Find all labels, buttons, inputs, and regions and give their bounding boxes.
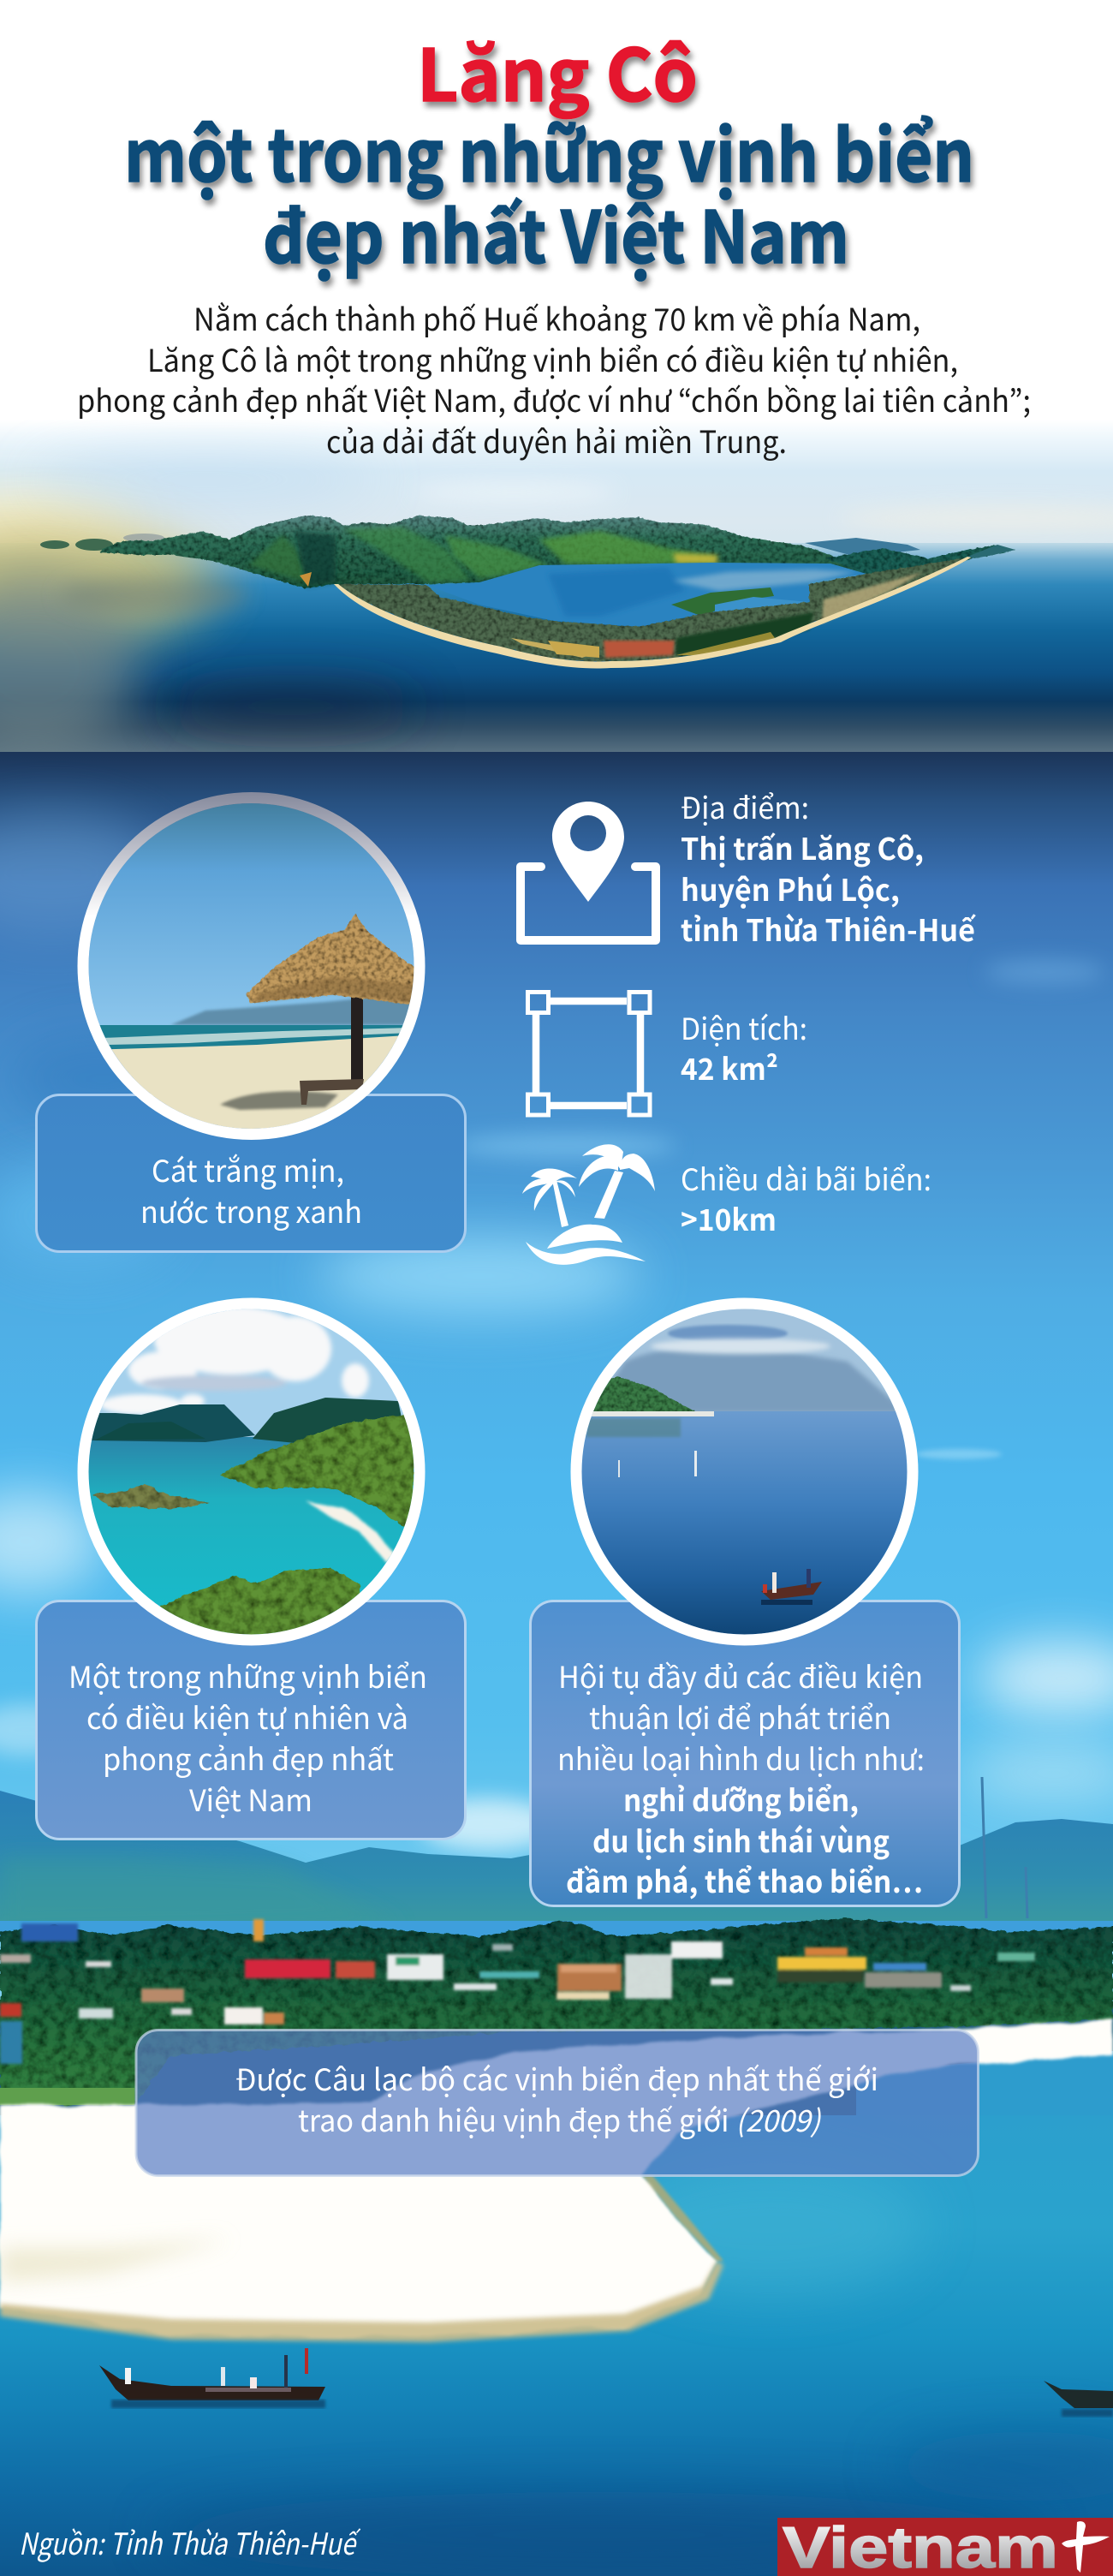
area text (681, 1005, 807, 1089)
location text: Địa điểm: (681, 784, 809, 828)
panel: tourism caption: đầm phá, thể thao biển… (566, 1858, 923, 1902)
green mountains (99, 516, 866, 588)
panel: white sand caption: Cát trắng mịn, (152, 1148, 344, 1191)
village houses (0, 1919, 1035, 2064)
panel: world bay award: Được Câu lạc bộ các vịnh biển đẹp nhất thế giới (235, 2056, 878, 2100)
far headland (805, 538, 920, 555)
panel: tourism caption: thuận lợi để phát triển (589, 1695, 891, 1738)
panel: world bay award: trao danh hiệu vịnh đẹp thế giới (2009) (298, 2097, 822, 2141)
area text: 42 km² (681, 1046, 778, 1089)
panel: bay caption: Một trong những vịnh biển (68, 1654, 427, 1697)
main panel background (0, 752, 1113, 2576)
icon: area square (527, 992, 650, 1115)
mountains (0, 1791, 1113, 1921)
location text: tỉnh Thừa Thiên-Huế (681, 907, 977, 951)
panel: bay caption: có điều kiện tự nhiên và (86, 1695, 408, 1738)
sky (0, 752, 1113, 2036)
sand spit (0, 2019, 1113, 2338)
panel: tourism caption: nghỉ dưỡng biển, (623, 1777, 859, 1821)
icon: location pin on map (521, 802, 656, 940)
beach length text: Chiều dài bãi biển: (681, 1156, 931, 1200)
panel: tourism caption: Hội tụ đầy đủ các điều kiện (558, 1654, 923, 1697)
logo: Vietnam+ (777, 2515, 1113, 2576)
source note: Nguồn: Tỉnh Thừa Thiên-Huế (19, 2520, 360, 2564)
eastern hills (827, 545, 1015, 574)
heading: đẹp nhất Việt Nam (263, 181, 849, 284)
beach crescent (334, 557, 973, 668)
lagoon (426, 563, 866, 627)
panel: tourism caption: du lịch sinh thái vùng (592, 1818, 890, 1862)
small offshore islets (40, 534, 164, 551)
photo: beach with thatched umbrella (83, 796, 428, 1148)
fishing boat right (1044, 2381, 1113, 2417)
east tip (967, 545, 1015, 558)
panel: tourism caption: nhiều loại hình du lịch như: (557, 1736, 925, 1780)
far water strip (0, 1921, 1113, 1940)
intro paragraph: Lăng Cô là một trong những vịnh biển có điều kiện tự nhiên, (147, 337, 958, 381)
panel: bay caption: phong cảnh đẹp nhất (103, 1736, 394, 1780)
intro paragraph: Nằm cách thành phố Huế khoảng 70 km về phía Nam, (193, 295, 920, 340)
icon: palm island (522, 1144, 655, 1265)
heading: Lăng Cô (417, 19, 698, 122)
beach length text: >10km (681, 1196, 777, 1240)
fishing boat left (99, 2348, 325, 2408)
photo: tropical green bay (83, 1303, 428, 1644)
area text: Diện tích: (681, 1005, 807, 1049)
dark lagoon (0, 2004, 1113, 2115)
intro paragraph: phong cảnh đẹp nhất Việt Nam, được ví như “chốn bồng lai tiên cảnh”; (77, 377, 1031, 421)
location text: Thị trấn Lăng Cô, (681, 826, 924, 869)
tree belt (0, 1918, 1113, 2105)
location text (681, 784, 977, 951)
panel: white sand caption: nước trong xanh (140, 1189, 362, 1232)
location text: huyện Phú Lộc, (681, 867, 900, 910)
heading (124, 19, 974, 284)
panel: white sand caption (36, 1094, 466, 1252)
town strip (338, 557, 973, 661)
sea (0, 2115, 1113, 2576)
panel: bay caption: Việt Nam (189, 1777, 312, 1821)
clouds (0, 814, 1113, 1850)
heading: một trong những vịnh biển (124, 99, 974, 203)
panel: world bay award (136, 2030, 978, 2175)
intro paragraph: của dải đất duyên hải miền Trung. (326, 418, 787, 462)
intro paragraph (77, 295, 1031, 462)
beach length text (681, 1156, 931, 1240)
panel: tourism caption (531, 1601, 959, 1906)
hero panoramic photo of Lăng Cô bay (0, 420, 1113, 762)
panel: bay caption (36, 1601, 466, 1840)
photo: calm lagoon with fishing boat (574, 1303, 916, 1643)
lagoon peninsula (671, 587, 774, 615)
telecom masts (982, 1777, 1027, 1918)
